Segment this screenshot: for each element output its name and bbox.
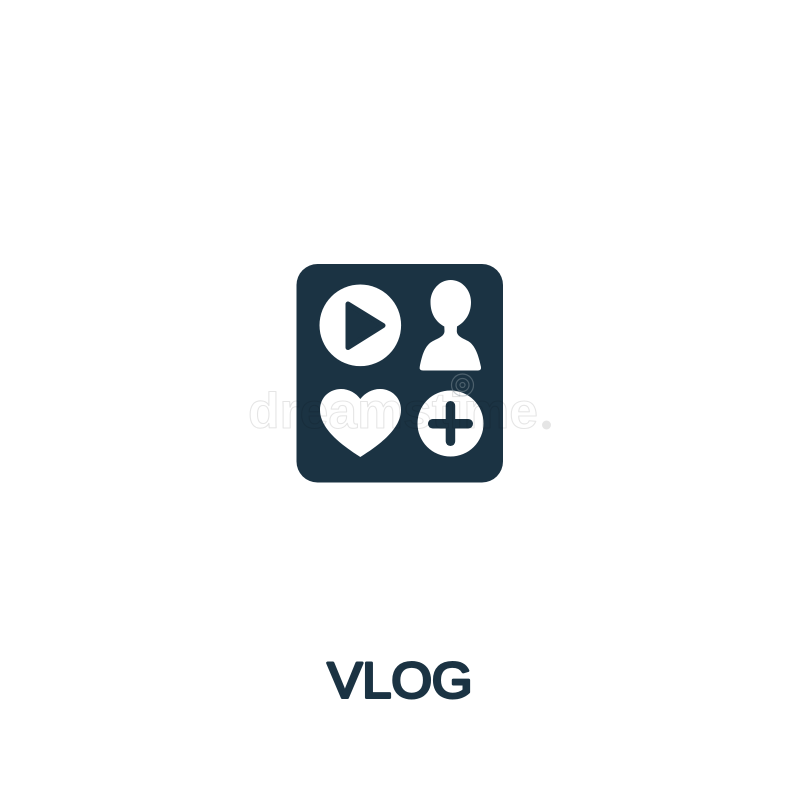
title: VLOG [328, 652, 472, 708]
watermark dot [542, 420, 551, 430]
watermark spiral logo [452, 374, 474, 396]
icon: person [420, 280, 481, 370]
watermark: dreamstime [248, 383, 538, 439]
icon: play button [320, 284, 401, 366]
tile background [296, 264, 503, 482]
icon: vlog tile [296, 264, 503, 482]
icon: heart [320, 389, 401, 457]
icon: add button [418, 390, 484, 456]
